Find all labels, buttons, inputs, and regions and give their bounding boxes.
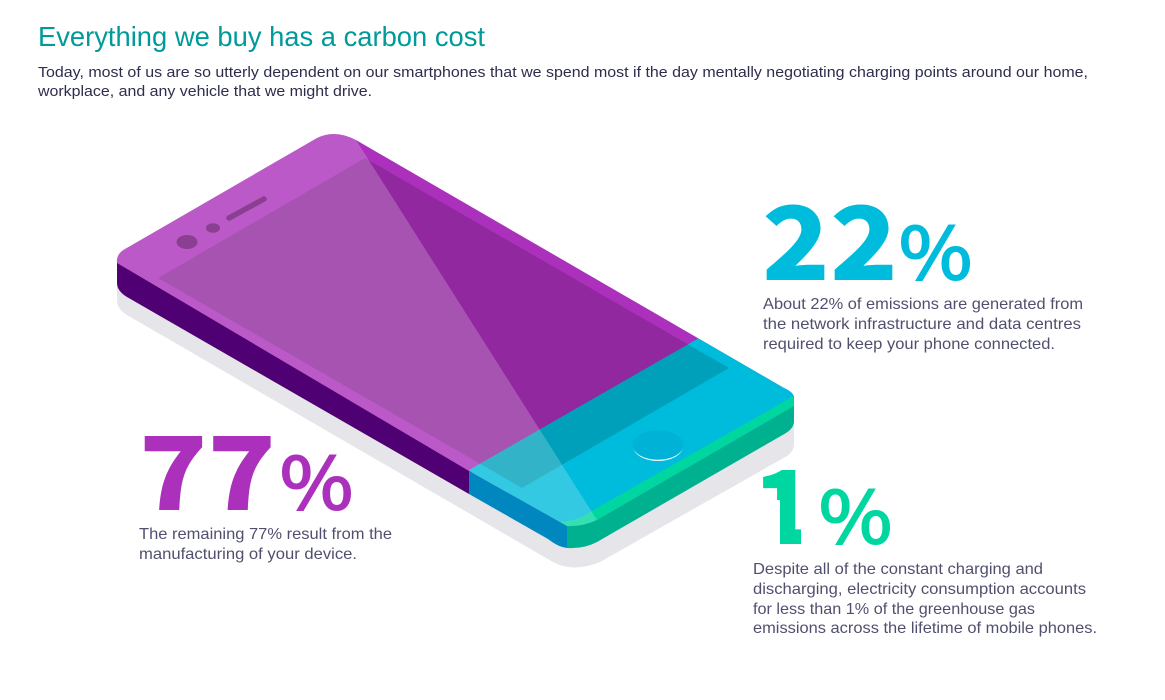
cyan section of face <box>469 338 794 526</box>
phone side: green <box>567 397 794 548</box>
icon: speaker <box>229 199 264 218</box>
percent sign: % <box>899 195 972 300</box>
description: The remaining 77% result from the <box>139 526 392 543</box>
description: manufacturing of your device. <box>139 546 357 563</box>
description: About 22% of emissions are generated from <box>763 296 1083 313</box>
phone side: blue <box>469 470 567 548</box>
intro text: workplace, and any vehicle that we might drive. <box>37 83 372 100</box>
description: for less than 1% of the greenhouse gas <box>753 601 1035 618</box>
light reflection wedge <box>100 120 597 540</box>
description <box>139 526 392 563</box>
percent sign: % <box>819 459 892 564</box>
stat: 77% <box>139 393 392 563</box>
stat: 1% <box>753 470 1096 636</box>
screen <box>158 158 729 488</box>
number 1: 1 <box>753 427 815 574</box>
number 22: 22 <box>762 163 898 310</box>
title: Everything we buy has a carbon cost <box>38 21 485 52</box>
description: emissions across the lifetime of mobile phones. <box>753 620 1097 637</box>
percent sign: % <box>280 425 353 530</box>
description: the network infrastructure and data centres <box>763 316 1081 333</box>
description: discharging, electricity consumption accounts <box>753 581 1086 598</box>
number 77: 77 <box>139 393 276 540</box>
icon: front camera <box>176 235 198 249</box>
stat: 22% <box>762 163 1083 353</box>
illustration: isometric smartphone <box>100 120 820 568</box>
icon: home button <box>632 430 684 461</box>
description <box>753 561 1097 637</box>
icon: sensor <box>206 223 220 233</box>
phone shadow <box>117 285 794 568</box>
intro text: Today, most of us are so utterly dependent on our smartphones that we spend most if the day mentally negotiating charging points around our home, <box>38 64 1088 81</box>
green front edge <box>560 396 794 526</box>
purple section of face <box>116 134 794 526</box>
description: Despite all of the constant charging and <box>753 561 1043 578</box>
description: required to keep your phone connected. <box>763 336 1055 353</box>
description <box>763 296 1083 353</box>
phone side: purple <box>117 262 469 494</box>
intro text <box>37 64 1088 100</box>
phone top face <box>116 134 794 526</box>
infographic <box>38 26 1096 636</box>
